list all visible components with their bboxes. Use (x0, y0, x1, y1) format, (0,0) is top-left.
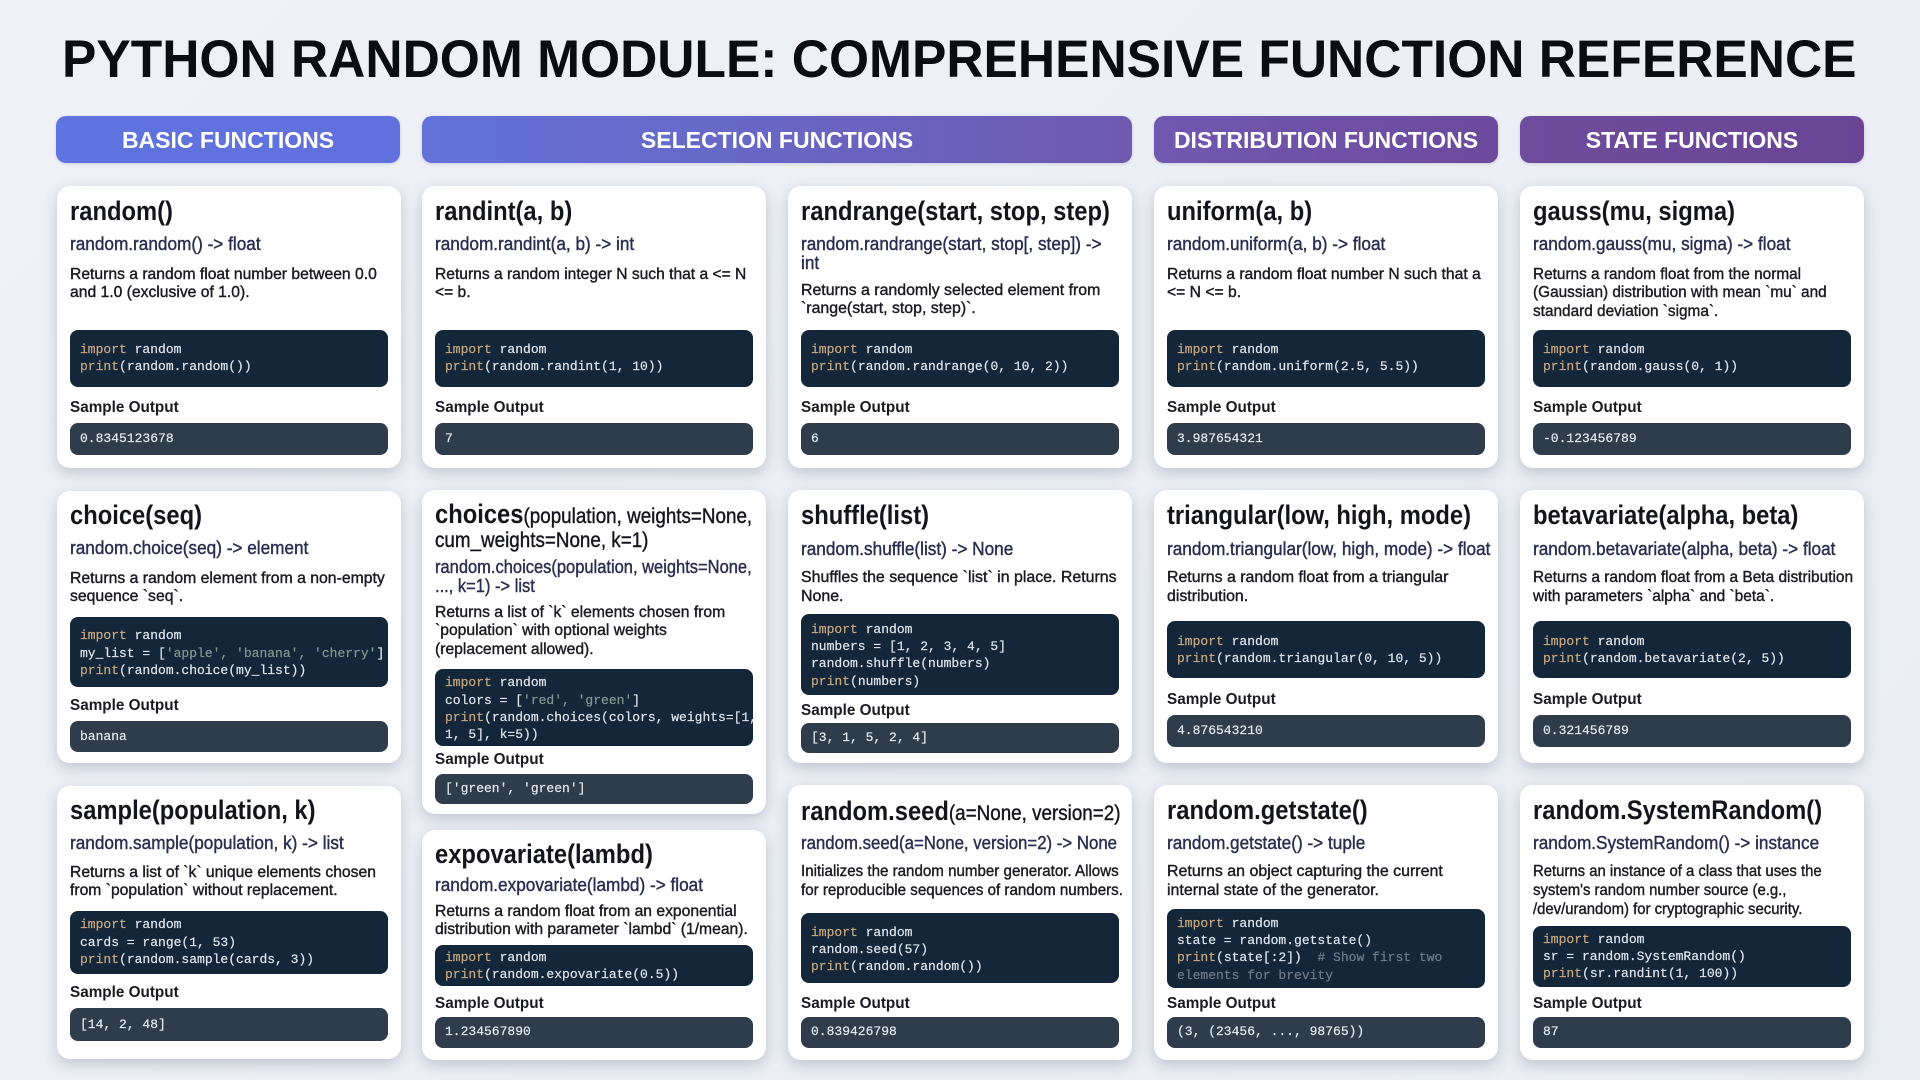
panel: shuffle (788, 490, 1132, 763)
output label: Sample Output (801, 995, 910, 1012)
code block: import random print(random.triangular(0, 10, 5)) (1177, 634, 1442, 666)
description: Initializes the random number generator. Allows (801, 863, 1119, 880)
description: Returns a random float from an exponential (435, 902, 737, 920)
function name: sample(population, k) (70, 795, 316, 825)
output value (435, 1017, 752, 1048)
output value: 4.876543210 (1177, 723, 1263, 738)
signature: random.choices(population, weights=None, (435, 556, 752, 576)
output value: 3.987654321 (1177, 431, 1263, 446)
description: (Gaussian) distribution with mean `mu` and (1533, 284, 1827, 301)
heading: selection functions (422, 116, 1132, 163)
code block (1533, 926, 1850, 987)
function name: randrange(start, stop, step) (801, 196, 1110, 226)
description (801, 863, 1123, 899)
code block: import random state = random.getstate() print(state[:2]) # Show first two elements for brevity (1177, 916, 1442, 983)
output value (70, 423, 388, 455)
output value: (3, (23456, ..., 98765)) (1177, 1024, 1364, 1039)
description: for reproducible sequences of random numbers. (801, 882, 1123, 899)
output value: [14, 2, 48] (80, 1017, 166, 1032)
signature: random.uniform(a, b) -> float (1167, 234, 1385, 254)
signature: random.expovariate(lambd) -> float (435, 874, 703, 894)
output label: Sample Output (435, 399, 544, 416)
description (1532, 569, 1853, 605)
output value: 1.234567890 (445, 1024, 531, 1039)
description: Returns a random float number between 0.0 (70, 266, 377, 282)
code block (1533, 621, 1850, 678)
function name: cum_weights=None, k=1) (435, 528, 648, 552)
signature: random.betavariate(alpha, beta) -> float (1533, 538, 1835, 558)
heading: basic functions (56, 116, 400, 163)
description: distribution. (1167, 588, 1248, 605)
panel: betavariate (1520, 490, 1864, 763)
description: Returns a random integer N such that a <= N (435, 266, 746, 282)
code block (435, 945, 752, 986)
function name: triangular(low, high, mode) (1167, 500, 1471, 530)
panel: choice (57, 491, 400, 763)
signature: random.getstate() -> tuple (1167, 832, 1365, 852)
signature: random.seed(a=None, version=2) -> None (801, 832, 1117, 852)
description: None. (801, 588, 843, 605)
description (70, 266, 377, 301)
code block: import random my_list = ['apple', 'banana', 'cherry'] print(random.choice(my_list)) (80, 628, 384, 678)
function name: random() (70, 196, 173, 226)
signature (801, 234, 1101, 272)
description: Returns a random float from a Beta distribution (1533, 569, 1853, 586)
description (435, 266, 746, 301)
signature: ..., k=1) -> list (435, 576, 535, 596)
signature: random.randint(a, b) -> int (435, 234, 634, 254)
signature: random.sample(population, k) -> list (70, 833, 344, 853)
output label: Sample Output (70, 399, 179, 416)
description: `range(start, stop, step)`. (801, 300, 976, 317)
panel: expovariate (422, 830, 766, 1060)
description (435, 902, 748, 938)
description (1167, 266, 1481, 301)
function name (435, 499, 752, 552)
panel: choices (422, 490, 766, 814)
signature: random.choice(seq) -> element (70, 538, 308, 558)
output value (1533, 715, 1850, 747)
code block: import random colors = ['red', 'green'] print(random.choices(colors, weights=[1, 1, 5], k=5)) (445, 675, 752, 742)
panel: triangular (1154, 490, 1498, 763)
code block: import random numbers = [1, 2, 3, 4, 5] random.shuffle(numbers) print(numbers) (811, 622, 1006, 689)
output value: 6 (811, 431, 819, 446)
description (1167, 569, 1448, 605)
signature: random.triangular(low, high, mode) -> float (1167, 538, 1490, 558)
description: Returns a random float from the normal (1533, 266, 1801, 282)
description: Shuffles the sequence `list` in place. Returns (801, 569, 1117, 586)
code block (801, 913, 1118, 982)
function name: gauss(mu, sigma) (1533, 196, 1735, 226)
description: standard deviation `sigma`. (1533, 303, 1718, 320)
description (70, 864, 376, 899)
code block: import random print(random.random()) (80, 342, 252, 374)
description: distribution with parameter `lambd` (1/mean). (435, 921, 748, 938)
output value (435, 774, 752, 804)
output label: Sample Output (70, 697, 179, 714)
code block (801, 330, 1118, 387)
output value: 87 (1543, 1024, 1559, 1039)
code block (1167, 621, 1484, 678)
description: with parameters `alpha` and `beta`. (1533, 588, 1774, 605)
output value: -0.123456789 (1543, 431, 1637, 446)
code block: import random cards = range(1, 53) print(random.sample(cards, 3)) (80, 917, 314, 967)
output value: [3, 1, 5, 2, 4] (811, 730, 928, 745)
output label: Sample Output (1533, 995, 1642, 1012)
function name: expovariate(lambd) (435, 839, 653, 869)
output value: ['green', 'green'] (445, 780, 585, 796)
panel: uniform (1154, 186, 1498, 468)
description: (replacement allowed). (435, 641, 594, 658)
output value (1533, 1017, 1850, 1048)
description: internal state of the generator. (1167, 882, 1379, 899)
code block: import random print(random.randint(1, 10)) (445, 342, 663, 374)
code block: import random print(random.uniform(2.5, 5.5)) (1177, 342, 1419, 374)
output label: Sample Output (801, 702, 910, 719)
function name: random.SystemRandom() (1533, 795, 1822, 825)
heading: distribution functions: DISTRIBUTION FUNCTIONS (1174, 127, 1478, 153)
description: and 1.0 (exclusive of 1.0). (70, 284, 250, 301)
code block (70, 617, 388, 687)
code block (435, 330, 752, 387)
output value (1167, 423, 1484, 455)
output value (801, 1017, 1118, 1048)
output label: Sample Output (70, 984, 179, 1001)
description: Returns a random float number N such that a (1167, 266, 1481, 282)
function name: uniform(a, b) (1167, 196, 1312, 226)
code block: import random print(random.betavariate(2, 5)) (1543, 634, 1785, 666)
signature: random.shuffle(list) -> None (801, 538, 1013, 558)
function name: random.seed(a=None, version=2) (801, 796, 1121, 826)
signature: random.random() -> float (70, 234, 261, 254)
function name: shuffle(list) (801, 500, 929, 530)
output value: 0.839426798 (811, 1024, 897, 1039)
function name: choices(population, weights=None, (435, 499, 752, 529)
function name: random.getstate() (1167, 795, 1368, 825)
output label: Sample Output (1533, 399, 1642, 416)
description: <= b. (435, 284, 471, 301)
panel: SystemRandom (1520, 785, 1864, 1060)
description: system's random number source (e.g., (1533, 882, 1786, 899)
panel: random() (57, 186, 400, 468)
description: Returns a list of `k` elements chosen from (435, 604, 725, 620)
heading: basic functions: BASIC FUNCTIONS (122, 127, 334, 153)
signature: random.gauss(mu, sigma) -> float (1533, 234, 1790, 254)
code block: import random print(random.expovariate(0.5)) (445, 950, 679, 982)
description (1167, 863, 1443, 899)
description: sequence `seq`. (70, 588, 183, 605)
code block (70, 330, 388, 387)
panel: getstate (1154, 785, 1498, 1060)
output label: Sample Output (1167, 399, 1276, 416)
heading: state functions: STATE FUNCTIONS (1586, 127, 1798, 153)
panel: sample (57, 786, 400, 1059)
panel: randint (422, 186, 766, 468)
output value: 7 (445, 431, 453, 446)
description: Returns an object capturing the current (1167, 863, 1443, 880)
output value: 0.321456789 (1543, 723, 1629, 738)
panel: randrange (788, 186, 1132, 468)
code block: import random print(random.gauss(0, 1)) (1543, 342, 1738, 374)
panel: random.seed (788, 785, 1132, 1060)
output label: Sample Output (1167, 690, 1276, 708)
output value (435, 423, 752, 455)
description: from `population` without replacement. (70, 882, 338, 899)
code block: import random random.seed(57) print(random.random()) (811, 925, 983, 974)
panel: gauss (1520, 186, 1864, 468)
signature: random.randrange(start, stop[, step]) -> (801, 234, 1101, 254)
code block: import random print(random.randrange(0, 10, 2)) (811, 342, 1068, 374)
heading: state functions (1520, 116, 1864, 163)
code block: import random sr = random.SystemRandom() print(sr.randint(1, 100)) (1543, 932, 1746, 981)
output value: banana (80, 729, 127, 744)
description: Returns a randomly selected element from (801, 282, 1100, 298)
output value (70, 721, 388, 752)
output value (1533, 423, 1850, 455)
description: Returns a random float from a triangular (1167, 569, 1448, 586)
description: <= N <= b. (1167, 284, 1241, 301)
description (1533, 266, 1827, 320)
code block (1533, 330, 1850, 387)
output label: Sample Output (1533, 690, 1642, 708)
output value (70, 1008, 388, 1041)
output label: Sample Output (1167, 995, 1276, 1012)
description (70, 570, 385, 605)
output label: Sample Output (801, 399, 910, 416)
code block (1167, 330, 1484, 387)
description: /dev/urandom) for cryptographic security. (1533, 901, 1802, 918)
output value (1167, 1017, 1484, 1048)
description: Returns a list of `k` unique elements chosen (70, 864, 376, 880)
description (801, 282, 1100, 317)
heading: distribution functions (1154, 116, 1498, 163)
heading: selection functions: SELECTION FUNCTIONS (641, 127, 913, 153)
description (435, 604, 725, 658)
function name: randint(a, b) (435, 196, 572, 226)
output label: Sample Output (435, 995, 544, 1012)
description (801, 569, 1117, 605)
description: `population` with optional weights (435, 622, 667, 639)
output label: Sample Output (435, 751, 544, 768)
signature: random.SystemRandom() -> instance (1533, 832, 1819, 852)
signature (435, 556, 752, 596)
description: Returns a random element from a non-empty (70, 570, 385, 586)
signature: int (801, 252, 819, 272)
title: PYTHON RANDOM MODULE: COMPREHENSIVE FUNCTION REFERENCE (62, 30, 1857, 89)
description (1532, 863, 1822, 918)
description: Returns an instance of a class that uses the (1533, 863, 1822, 880)
output value (801, 423, 1118, 455)
function name: betavariate(alpha, beta) (1533, 500, 1798, 530)
code block (70, 911, 388, 974)
function name: choice(seq) (70, 500, 202, 530)
output value: 0.8345123678 (80, 431, 174, 446)
output value (801, 723, 1118, 753)
output value (1167, 715, 1484, 747)
code block (801, 614, 1118, 695)
